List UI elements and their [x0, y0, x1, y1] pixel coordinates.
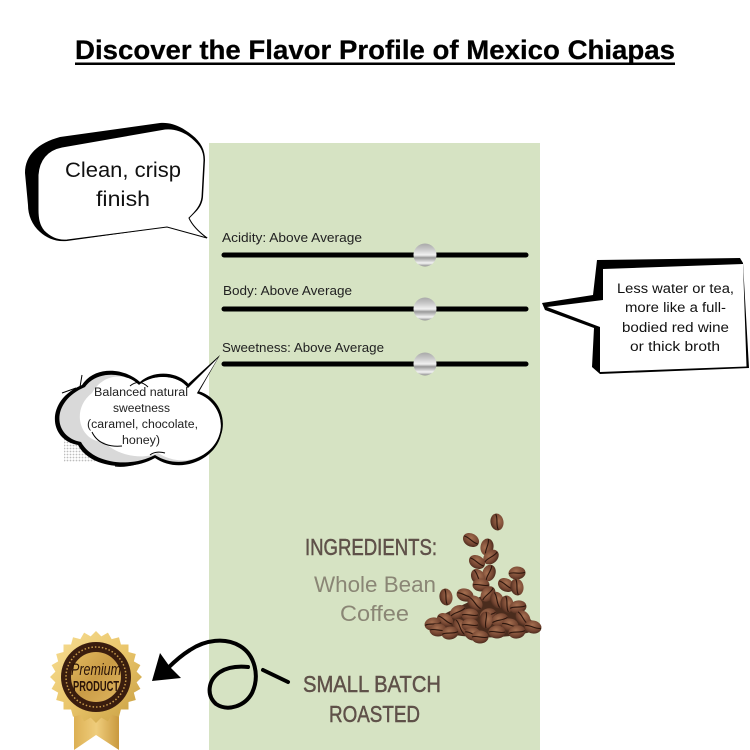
text: small batch roasted: ROASTED [329, 701, 420, 727]
text: small batch roasted [303, 671, 441, 727]
callout: clean crisp finish speech bubble: Clean, crisp [65, 159, 181, 182]
callout: sweetness thought cloud: Balanced natural [94, 387, 188, 399]
slider: body [223, 284, 526, 320]
slider: sweetness: Sweetness: Above Average [222, 341, 384, 355]
callout: sweetness thought cloud: (caramel, chocolate, [87, 419, 198, 431]
callout: sweetness thought cloud: sweetness [113, 403, 170, 415]
heading: ingredients: INGREDIENTS: [305, 534, 437, 560]
callout: full bodied speech bubble: or thick broth [630, 339, 720, 354]
callout: full bodied speech bubble: bodied red wine [622, 320, 729, 335]
slider: body: Body: Above Average [223, 284, 352, 298]
callout: full bodied speech bubble: more like a full- [625, 300, 726, 315]
icon: premium product badge [48, 629, 144, 750]
panel: green background [209, 143, 540, 750]
callout: full bodied speech bubble [542, 258, 749, 374]
callout: clean crisp finish speech bubble: finish [96, 188, 150, 211]
slider: sweetness [222, 341, 526, 376]
slider: acidity: Acidity: Above Average [222, 231, 362, 245]
callout: sweetness thought cloud: honey) [122, 435, 160, 447]
text: whole bean coffee: Coffee [340, 601, 409, 626]
icon: premium product badge: PRODUCT [73, 678, 119, 695]
callout: clean crisp finish speech bubble [25, 123, 208, 241]
text: small batch roasted: SMALL BATCH [303, 671, 441, 697]
icon: premium product badge: Premium [71, 660, 121, 679]
callout: full bodied speech bubble: Less water or tea, [617, 281, 734, 296]
title: Discover the Flavor Profile of Mexico Chiapas [75, 35, 675, 65]
text: whole bean coffee: Whole Bean [314, 572, 436, 597]
callout: sweetness thought cloud [55, 355, 223, 466]
image: coffee bean pile [424, 513, 542, 644]
text: whole bean coffee [314, 572, 436, 626]
slider: acidity [222, 231, 526, 266]
arrow: looping arrow to badge [152, 641, 288, 708]
